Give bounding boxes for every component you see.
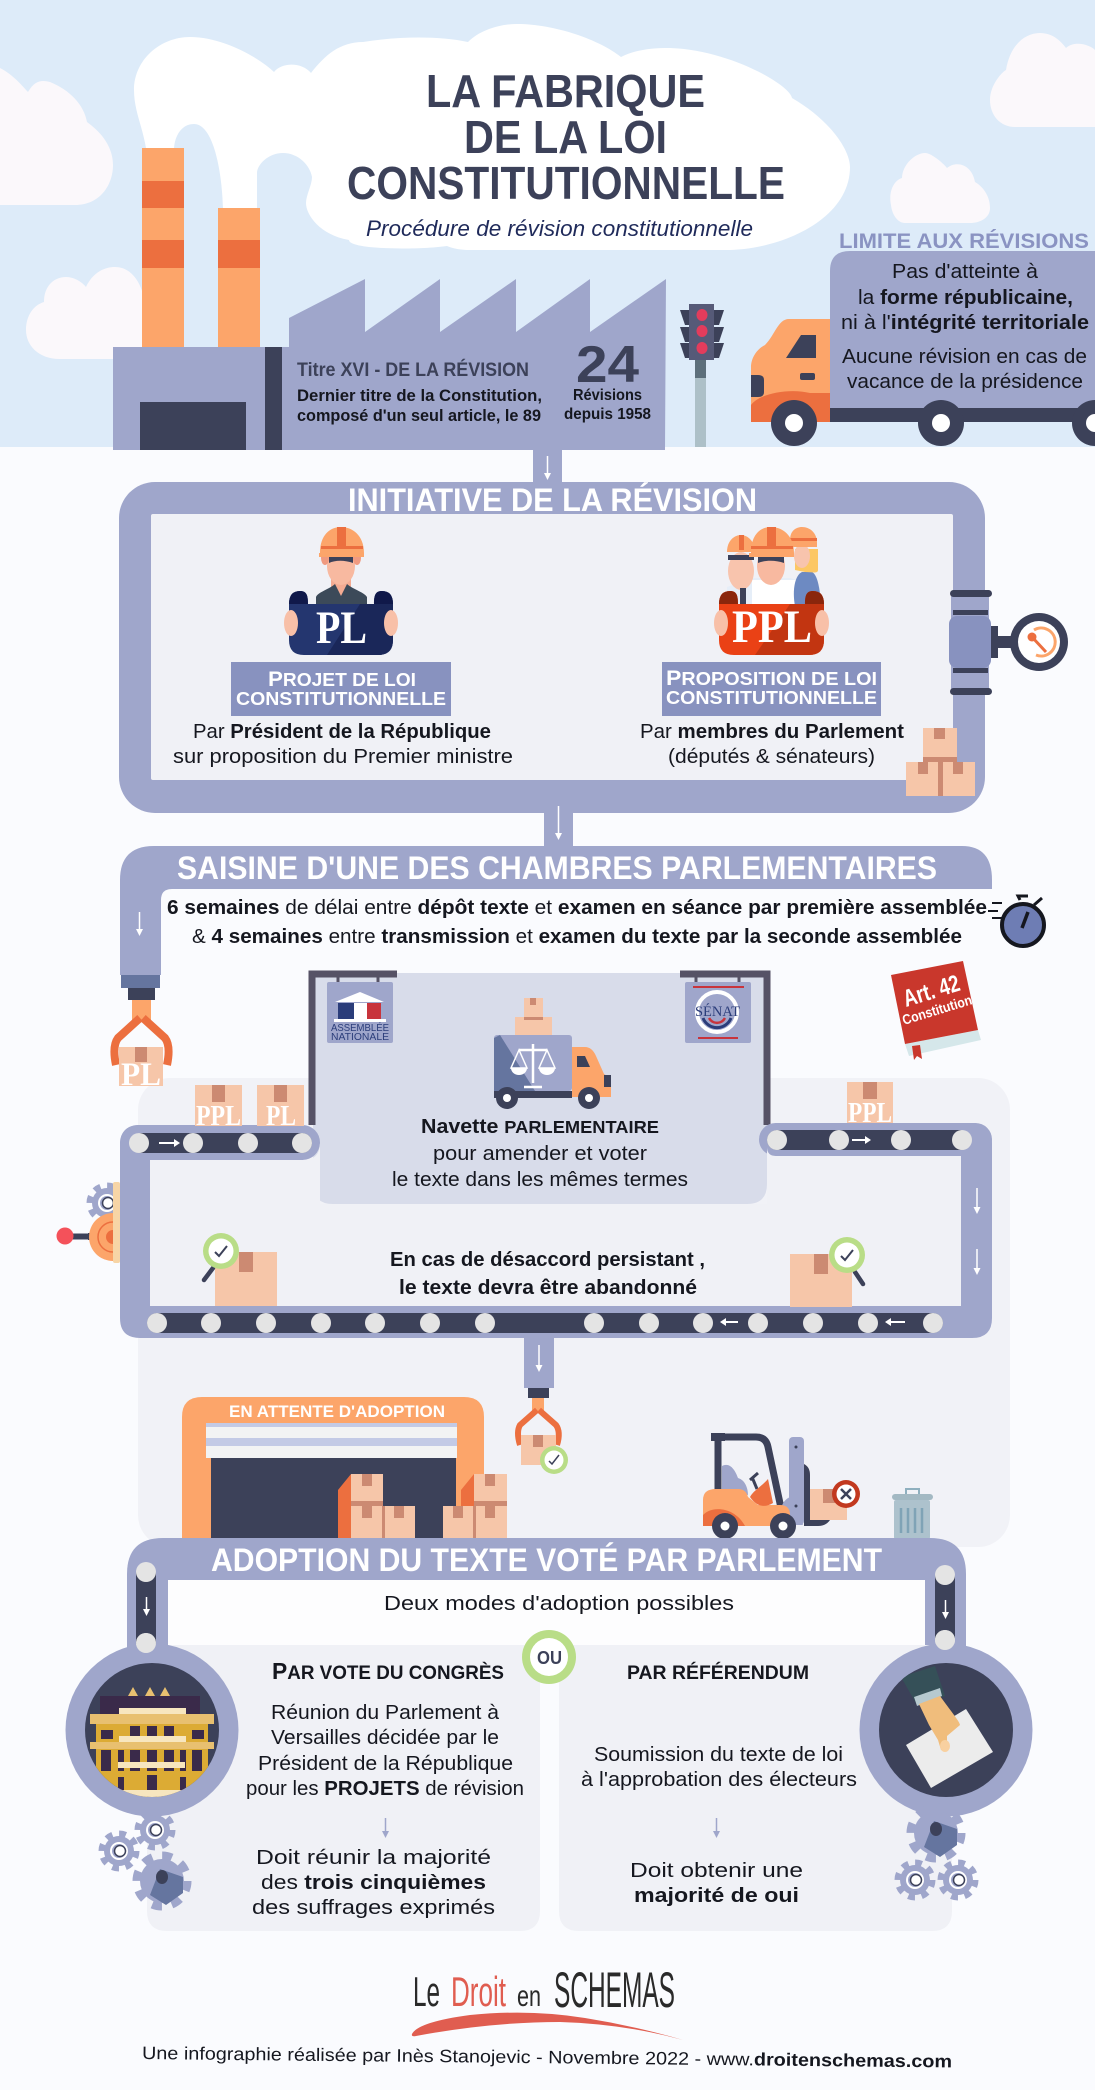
logo: Droit xyxy=(451,1968,506,2015)
title: LA FABRIQUE xyxy=(426,65,705,117)
logo: en xyxy=(517,1980,541,2013)
icon: stopwatch xyxy=(988,896,1044,946)
text: congress procedure: pour les PROJETS de révision xyxy=(246,1777,524,1800)
factory xyxy=(113,148,666,450)
warehouse: EN ATTENTE D'ADOPTION xyxy=(229,1402,445,1421)
label: proposition de loi: CONSTITUTIONNELLE xyxy=(666,688,877,708)
arrow: initiative to saisine xyxy=(544,806,573,846)
heading: saisine: SAISINE D'UNE DES CHAMBRES PARLEMENTAIRES xyxy=(177,850,937,886)
icon: PPL scroll with workers xyxy=(714,527,829,655)
text: titre XVI: Titre XVI - DE LA RÉVISION xyxy=(297,359,529,381)
text: congress majority xyxy=(252,1846,495,1919)
text: congress majority: des trois cinquièmes xyxy=(261,1871,486,1894)
box: PPL right: PPL xyxy=(848,1098,892,1129)
label: proposition de loi: PROPOSITION DE LOI xyxy=(666,667,877,690)
heading: initiative: INITIATIVE DE LA RÉVISION xyxy=(348,482,757,518)
box: PPL right xyxy=(847,1082,893,1129)
text: titre XVI: Dernier titre de la Constitution, xyxy=(297,386,542,405)
text: navette xyxy=(392,1115,688,1191)
text: referendum procedure: Soumission du texte de loi xyxy=(594,1743,843,1766)
text: referendum majority xyxy=(630,1859,803,1907)
card: referendum: PAR RÉFÉRENDUM xyxy=(627,1662,809,1684)
background: sky xyxy=(0,0,1095,447)
conveyor frame xyxy=(120,1123,992,1338)
card: congress: PAR VOTE DU CONGRÈS xyxy=(272,1658,504,1684)
card: congress xyxy=(147,1645,540,1931)
text: limits: Aucune révision en cas de xyxy=(842,346,1087,368)
icon: trash can xyxy=(892,1489,933,1539)
belt: bottom xyxy=(147,1313,943,1333)
text: congress procedure: Président de la République xyxy=(258,1752,513,1775)
stat: 24 revisions: depuis 1958 xyxy=(564,406,651,423)
icons: gears left xyxy=(102,1813,187,1906)
text: congress majority: Doit réunir la majorité xyxy=(256,1846,491,1869)
pipe: saisine header xyxy=(120,846,992,975)
text: delays: 6 semaines de délai entre dépôt texte et examen en séance par première assemblée xyxy=(167,896,987,919)
icon: article 42 book xyxy=(891,961,981,1060)
label: projet de loi: PROJET DE LOI xyxy=(268,668,416,691)
logo: SCHEMAS xyxy=(554,1962,675,2018)
text: limits: vacance de la présidence xyxy=(847,371,1083,393)
belt: top left xyxy=(129,1133,312,1153)
panel: adoption pipe xyxy=(127,1538,966,1660)
logo: Le xyxy=(413,1968,440,2015)
icon: PPL scroll with workers: PPL xyxy=(732,601,812,653)
text: congress majority: des suffrages exprimés xyxy=(252,1896,495,1919)
text: disagreement: En cas de désaccord persistant , xyxy=(390,1248,705,1271)
truck xyxy=(751,251,1095,446)
text: limits: ni à l'intégrité territoriale xyxy=(841,312,1089,334)
label: projet de loi: CONSTITUTIONNELLE xyxy=(236,689,446,709)
icons: gears right xyxy=(898,1808,975,1897)
text: congress procedure xyxy=(246,1701,524,1800)
icon: assemblée nationale sign xyxy=(327,974,393,1043)
text: members: Par membres du Parlement xyxy=(640,720,904,743)
text: titre XVI xyxy=(297,359,542,425)
icon: sénat sign xyxy=(685,974,751,1043)
icon: sénat sign: SÉNAT xyxy=(695,1003,740,1020)
warehouse xyxy=(182,1397,507,1538)
text: delays: & 4 semaines entre transmission et examen du texte par la seconde assemblée xyxy=(192,925,962,948)
panel: navette xyxy=(309,973,770,1204)
text: referendum procedure: à l'approbation des électeurs xyxy=(581,1768,857,1791)
box: PL: PL xyxy=(266,1101,296,1132)
text: limits xyxy=(841,261,1089,393)
background panel: parliament process xyxy=(138,1078,1010,1547)
belts: adoption sides xyxy=(136,1562,955,1653)
arrow and crane to adoption xyxy=(518,1338,568,1474)
stat: 24 revisions xyxy=(564,336,651,423)
icon: ballot medallion xyxy=(860,1630,1032,1816)
icon: assemblée nationale sign: ASSEMBLÉE xyxy=(331,1021,389,1034)
text: delays xyxy=(167,896,987,948)
title: CONSTITUTIONNELLE xyxy=(347,157,785,209)
card: referendum xyxy=(559,1645,952,1931)
icon: article 42 book: Art. 42 xyxy=(900,970,963,1013)
panel: initiative xyxy=(119,482,1068,813)
box: PPL: PPL xyxy=(196,1101,241,1132)
text: members: (députés & sénateurs) xyxy=(668,745,875,768)
text: navette: le texte dans les mêmes termes xyxy=(392,1168,688,1191)
icon: assemblée nationale sign: NATIONALE xyxy=(331,1031,389,1043)
icon: crane with PL box xyxy=(114,975,169,1093)
text: disagreement xyxy=(390,1248,705,1299)
icon: article 42 book: Constitution xyxy=(900,992,974,1028)
arrows: right pipe xyxy=(974,1188,980,1275)
belt: top right xyxy=(767,1130,972,1150)
arrow: factory to initiative xyxy=(533,450,562,483)
boxes: stacks xyxy=(338,1474,507,1538)
limit heading: LIMITE AUX RÉVISIONS xyxy=(839,230,1089,253)
badge: ou: OU xyxy=(537,1648,562,1668)
box: PPL xyxy=(195,1085,242,1132)
stat: 24 revisions: 24 xyxy=(576,336,639,394)
badge: ou xyxy=(522,1630,576,1684)
title cloud with smoke xyxy=(134,24,850,250)
text: congress procedure: Versailles décidée par le xyxy=(271,1726,499,1749)
icon: machine with lever xyxy=(56,1182,137,1263)
stat: 24 revisions: Révisions xyxy=(573,387,642,404)
box: PL xyxy=(257,1085,304,1132)
text: president: Par Président de la République xyxy=(193,720,491,743)
icon: crane with PL box: PL xyxy=(121,1057,161,1093)
icon: chimneys xyxy=(142,148,260,347)
text: limits: la forme républicaine, xyxy=(858,287,1073,309)
text: two modes: Deux modes d'adoption possibles xyxy=(384,1592,734,1615)
title: DE LA LOI xyxy=(464,111,667,163)
footer credit: Une infographie réalisée par Inès Stanojevic - Novembre 2022 - www. droitenschemas.com xyxy=(142,2043,952,2071)
text: referendum majority: majorité de oui xyxy=(634,1884,799,1907)
icon: valve xyxy=(949,590,1068,695)
icon: checked box right xyxy=(790,1237,865,1307)
text: disagreement: le texte devra être abandonné xyxy=(399,1276,697,1299)
logo xyxy=(412,1962,683,2040)
icon: forklift xyxy=(703,1433,860,1539)
text: navette: Navette PARLEMENTAIRE xyxy=(421,1115,659,1138)
label: proposition de loi xyxy=(662,662,881,716)
icon: delivery truck with scales xyxy=(494,998,611,1109)
boxes on conveyor xyxy=(195,1082,893,1132)
icon: versailles medallion xyxy=(66,1633,238,1816)
icon: PL scroll with worker xyxy=(284,527,398,655)
text: president: sur proposition du Premier ministre xyxy=(173,745,513,768)
icon: PL scroll with worker: PL xyxy=(316,602,367,654)
text: congress procedure: Réunion du Parlement à xyxy=(271,1701,500,1724)
heading: adoption: ADOPTION DU TEXTE VOTÉ PAR PARLEMENT xyxy=(211,1542,882,1578)
text: limits: Pas d'atteinte à xyxy=(892,261,1039,283)
text: referendum majority: Doit obtenir une xyxy=(630,1859,803,1882)
text: navette: pour amender et voter xyxy=(433,1142,647,1165)
icon: stacked boxes xyxy=(906,728,975,796)
clouds xyxy=(0,33,1095,359)
title xyxy=(347,65,785,209)
icon: traffic light xyxy=(680,304,724,447)
label: projet de loi xyxy=(231,662,451,716)
text: members xyxy=(640,720,904,768)
text: referendum procedure xyxy=(581,1743,857,1791)
text: titre XVI: composé d'un seul article, le 89 xyxy=(297,406,541,425)
icon: checked box left xyxy=(203,1233,277,1306)
subtitle: Procédure de révision constitutionnelle xyxy=(366,216,753,241)
text: president xyxy=(173,720,513,768)
